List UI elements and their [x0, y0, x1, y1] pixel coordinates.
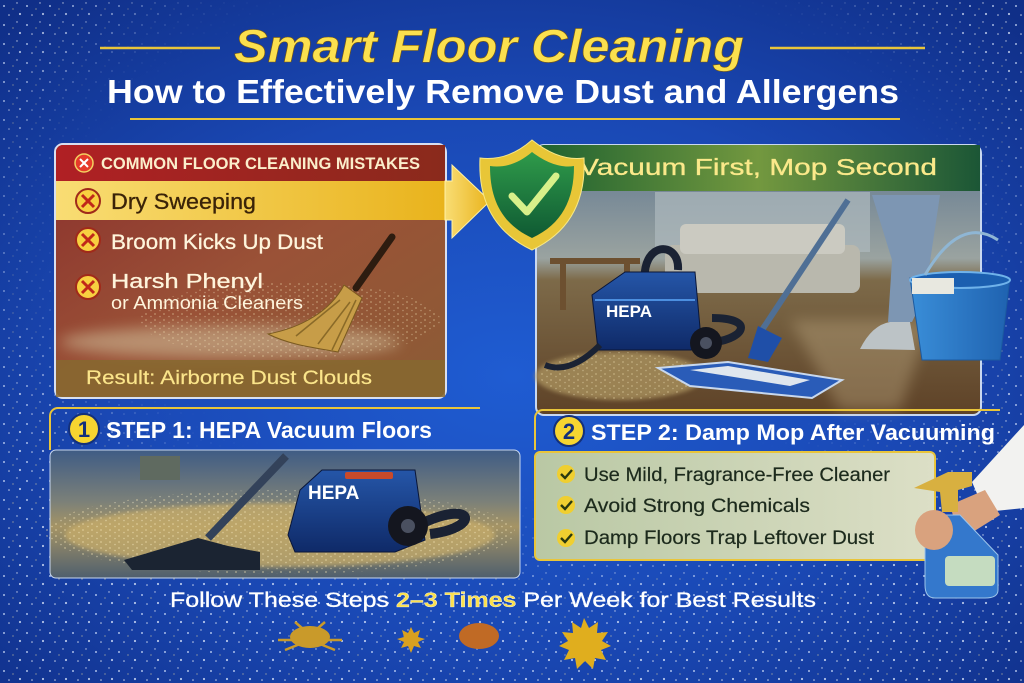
shield icon	[480, 140, 584, 250]
header: Vacuum First, Mop Second	[579, 154, 937, 180]
icon: allergens	[278, 618, 611, 669]
dry sweeping row: Dry Sweeping	[111, 189, 256, 214]
icon: bucket	[910, 233, 1010, 360]
panel: step 1	[45, 408, 520, 578]
checklist	[557, 465, 891, 549]
harsh cleaners row: Harsh Phenyl	[111, 271, 263, 293]
harsh cleaners row: or Ammonia Cleaners	[111, 293, 303, 313]
icon: mop	[658, 200, 848, 398]
icon: vacuum wand	[124, 456, 286, 570]
checklist: Avoid Strong Chemicals	[584, 496, 810, 517]
dry sweeping row	[56, 181, 445, 220]
heading: STEP 1: HEPA Vacuum Floors	[106, 417, 432, 443]
panel: common mistakes	[55, 144, 446, 398]
icon: broom	[268, 237, 392, 352]
subtitle: How to Effectively Remove Dust and Allergens	[107, 73, 899, 110]
header	[537, 145, 980, 191]
result strip: Result: Airborne Dust Clouds	[86, 368, 372, 389]
result strip	[56, 360, 445, 397]
icon: hepa vacuum	[545, 249, 741, 368]
harsh cleaners row	[76, 271, 303, 313]
icon: hepa vacuum	[288, 470, 465, 552]
wet floor shine	[790, 320, 930, 410]
dusty floor	[45, 490, 515, 574]
dusty floor	[535, 352, 705, 400]
icon: spray bottle and hand	[914, 425, 1024, 598]
sofa	[665, 224, 860, 293]
footer line: Follow These Steps 2–3 Times Per Week for Best Results	[170, 589, 816, 612]
person legs	[860, 195, 940, 350]
checklist: Damp Floors Trap Leftover Dust	[584, 528, 875, 549]
panel: step 2	[535, 410, 1000, 560]
room picture	[140, 456, 180, 480]
window	[655, 192, 870, 252]
broom row: Broom Kicks Up Dust	[111, 231, 323, 254]
mistakes header: COMMON FLOOR CLEANING MISTAKES	[101, 154, 420, 173]
title: Smart Floor Cleaning	[234, 20, 744, 72]
side table	[550, 258, 640, 310]
heading: STEP 2: Damp Mop After Vacuuming	[591, 420, 995, 445]
dust on floor	[60, 282, 440, 358]
heading: 1	[78, 417, 90, 442]
arrow	[445, 165, 490, 238]
icon: hepa vacuum: HEPA	[308, 483, 360, 504]
mistakes header	[56, 145, 445, 181]
panel: vacuum first mop second	[535, 145, 1010, 415]
icon: hepa vacuum: HEPA	[606, 302, 652, 321]
heading: 2	[563, 419, 575, 444]
checklist: Use Mild, Fragrance-Free Cleaner	[584, 465, 891, 486]
